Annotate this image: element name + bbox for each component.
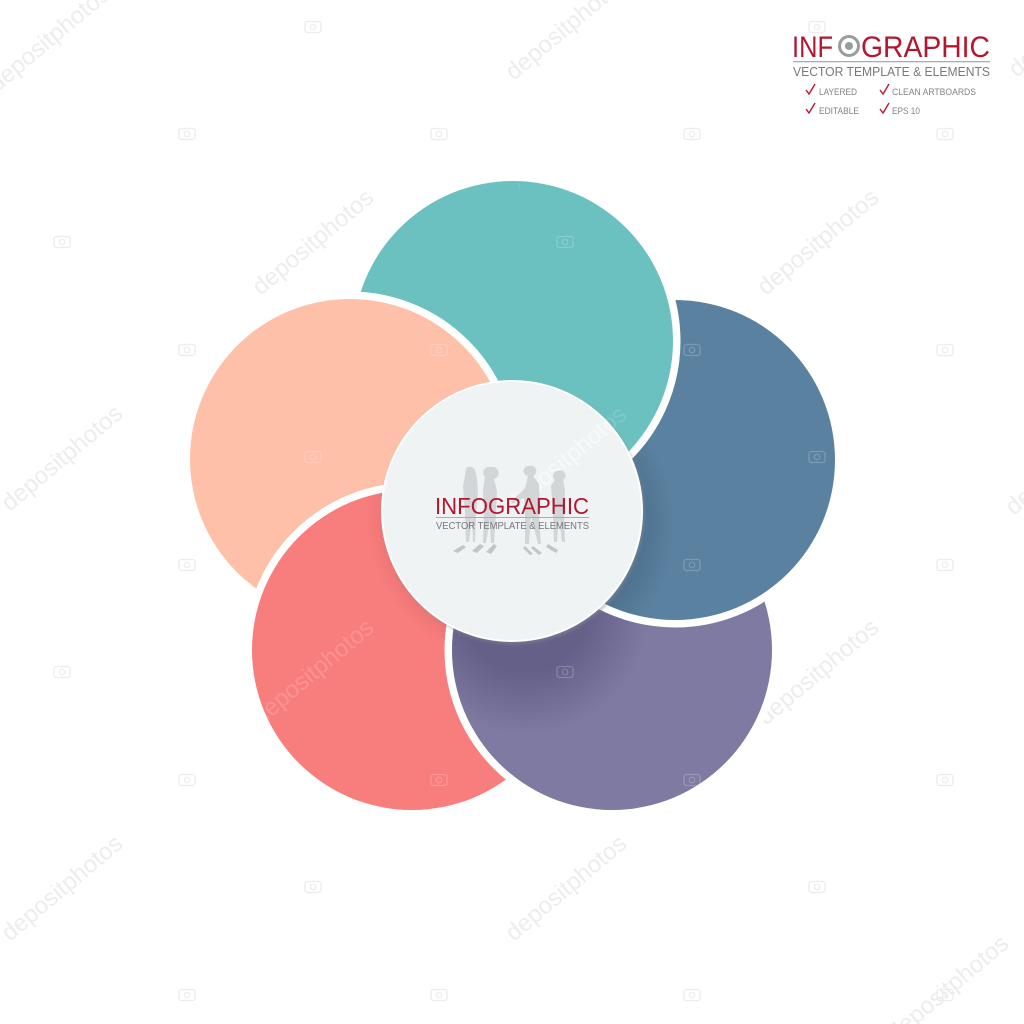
figure 3 — [511, 466, 541, 544]
petal: blue — [515, 300, 835, 620]
item: editable: EDITABLE — [819, 106, 859, 116]
petal: peach — [190, 299, 510, 619]
logo heading left part: INF — [792, 31, 833, 64]
item: layered — [806, 84, 857, 97]
centre circle — [382, 381, 642, 641]
centre divider — [436, 517, 589, 518]
watermark on teal petal and red petal: depositphotos — [500, 401, 632, 518]
item: editable — [806, 103, 859, 116]
centre title — [435, 493, 589, 532]
top-right logo — [792, 31, 990, 116]
item: eps 10 — [880, 103, 920, 116]
figure 1 — [463, 467, 478, 542]
watermark text on background: depositphotos — [0, 830, 128, 947]
feet shadows — [453, 544, 558, 555]
centre heading: INFOGRAPHIC — [435, 493, 589, 519]
watermark text on background: depositphotos — [247, 184, 379, 301]
watermark text on background: depositphotos — [752, 184, 884, 301]
figure 2 — [483, 467, 499, 543]
watermark on teal petal and red petal — [247, 401, 632, 731]
logo target icon — [840, 36, 858, 56]
petal: red — [252, 490, 572, 810]
item: clean artboards — [880, 84, 976, 97]
logo heading right part: GRAPHIC — [861, 31, 990, 64]
item: clean artboards: CLEAN ARTBOARDS — [892, 87, 976, 97]
watermark on teal petal and red petal: depositphotos — [247, 614, 379, 731]
item: layered: LAYERED — [819, 87, 857, 97]
petal: teal base — [353, 181, 673, 501]
silhouettes of people — [453, 466, 566, 555]
faint watermark icons on petals — [305, 236, 825, 786]
watermark text on background: depositphotos — [0, 400, 128, 517]
figure 4 — [551, 470, 566, 542]
petal: purple — [452, 490, 772, 810]
petal: teal overlap on blue — [519, 181, 680, 459]
logo divider — [793, 61, 990, 62]
centre subtitle: VECTOR TEMPLATE & ELEMENTS — [436, 520, 589, 532]
logo subtitle: VECTOR TEMPLATE & ELEMENTS — [793, 64, 990, 79]
checklist — [806, 84, 976, 116]
watermark text on background: depositphotos — [500, 830, 632, 947]
watermark text on background: depositphotos — [752, 614, 884, 731]
item: eps 10: EPS 10 — [892, 106, 920, 116]
watermark on centre circle: depositphotos — [500, 401, 632, 518]
